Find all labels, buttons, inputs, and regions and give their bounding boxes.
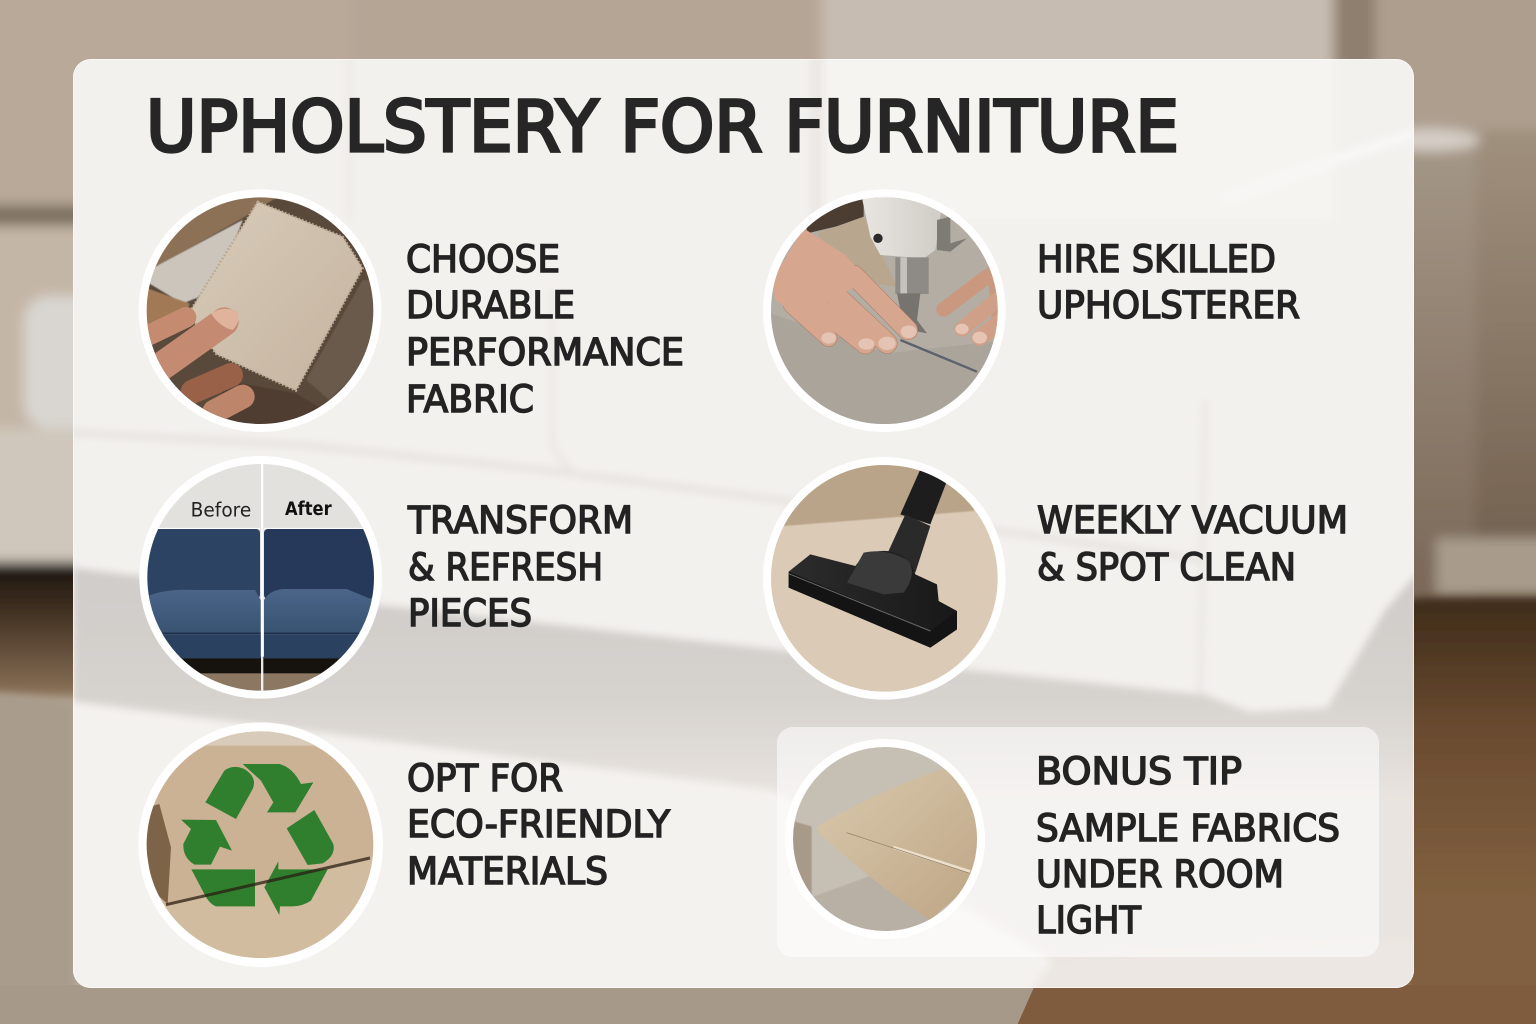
label: opt for eco-friendly materials: MATERIALS [407, 850, 608, 893]
label: choose durable performance fabric: CHOOSE [406, 238, 560, 281]
item: bonus tip [791, 739, 1339, 934]
label: sample fabrics under room light: UNDER ROOM [1036, 853, 1284, 896]
label: sample fabrics under room light [1036, 807, 1340, 942]
title: UPHOLSTERY FOR FURNITURE [146, 86, 1179, 168]
bonus tip panel [777, 727, 1379, 957]
label: after: After [285, 499, 332, 520]
item: eco-friendly materials [129, 714, 670, 974]
label: sample fabrics under room light: SAMPLE FABRICS [1036, 807, 1340, 850]
item: weekly vacuum [754, 448, 1348, 708]
label: hire skilled upholsterer: HIRE SKILLED [1037, 238, 1276, 281]
icon: before and after sofa photo [139, 456, 382, 699]
label: choose durable performance fabric: FABRIC [406, 378, 534, 421]
label: weekly vacuum and spot clean: WEEKLY VACUUM [1037, 499, 1348, 542]
recycling symbol [181, 764, 334, 915]
item: hire skilled upholsterer [754, 180, 1300, 440]
label: weekly vacuum and spot clean: & SPOT CLEAN [1037, 546, 1296, 589]
label: transform and refresh pieces: TRANSFORM [407, 499, 633, 542]
label: transform and refresh pieces: & REFRESH [408, 546, 603, 589]
item: choose durable fabric [129, 180, 684, 440]
item: transform and refresh [130, 447, 633, 707]
label: transform and refresh pieces: PIECES [408, 592, 532, 635]
label: transform and refresh pieces [407, 499, 633, 635]
icon: hands at sewing machine photo [763, 190, 1006, 432]
label: bonus tip heading: BONUS TIP [1036, 750, 1242, 793]
label: hire skilled upholsterer [1037, 238, 1300, 327]
label: before: Before [191, 499, 251, 522]
icon: fabric swatch photo [138, 190, 382, 432]
label: choose durable performance fabric: PERFORMANCE [406, 331, 684, 374]
icon: recycled fabric roll photo [138, 722, 383, 967]
label: choose durable performance fabric: DURABLE [406, 284, 575, 327]
label: hire skilled upholsterer: UPHOLSTERER [1037, 284, 1300, 327]
label: opt for eco-friendly materials: OPT FOR [407, 757, 563, 800]
label: weekly vacuum and spot clean [1037, 499, 1348, 589]
icon: vacuum nozzle photo [763, 457, 1006, 700]
label: sample fabrics under room light: LIGHT [1036, 899, 1141, 942]
icon: beige pillow photo [791, 739, 985, 931]
label: opt for eco-friendly materials [407, 757, 670, 893]
label: choose durable performance fabric [406, 238, 684, 421]
label: opt for eco-friendly materials: ECO-FRIENDLY [407, 803, 670, 846]
